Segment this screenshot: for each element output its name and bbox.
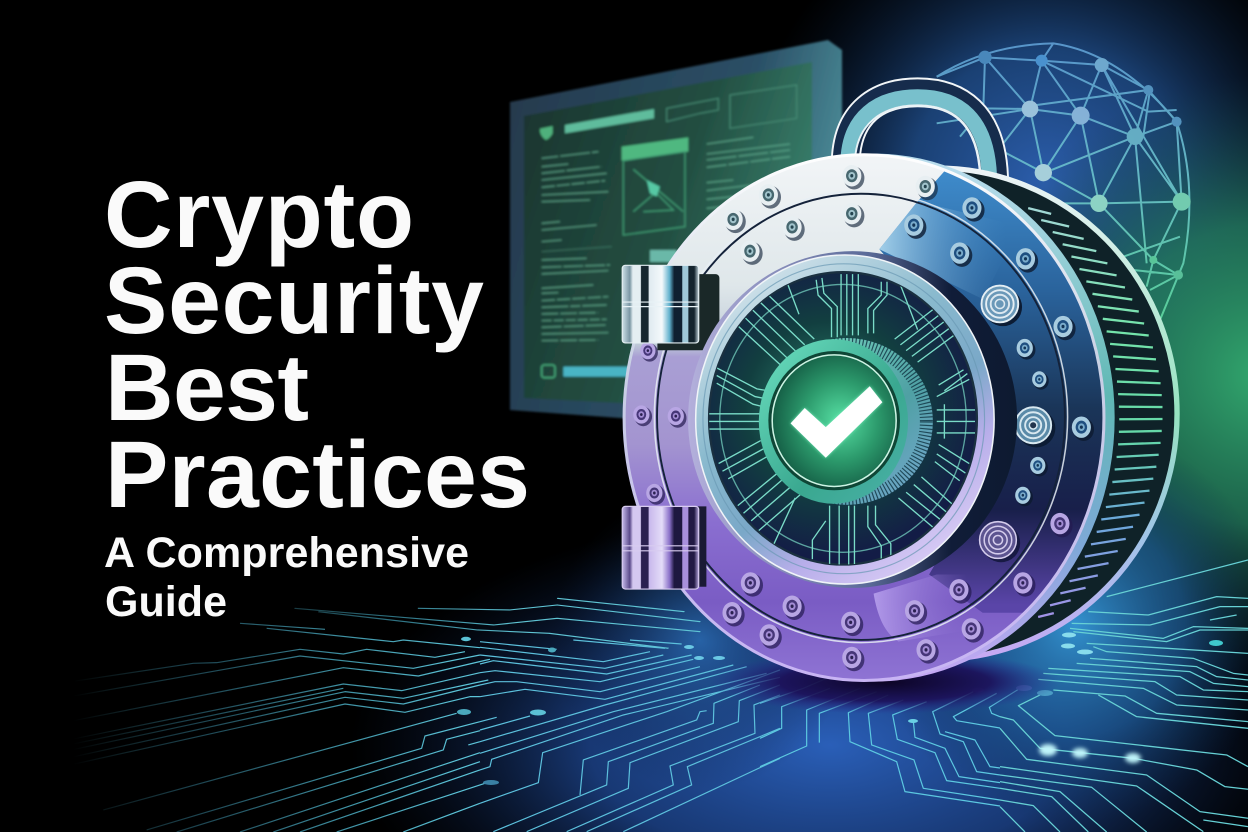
ring groove: [654, 191, 1068, 643]
vault padlock: [622, 92, 1177, 682]
circuit traces: centre left fan: [480, 640, 780, 832]
subtitle: [104, 529, 469, 626]
window glass with circuit: [709, 272, 977, 565]
title: Crypto: [104, 162, 414, 268]
combination dial: [759, 338, 933, 505]
rivets: [633, 165, 1094, 671]
back body with slats: [633, 154, 1177, 682]
hinges: [622, 265, 719, 589]
shadow under lock: [710, 650, 1060, 714]
title: Best: [105, 335, 309, 441]
front ring: [623, 150, 1113, 682]
circuit traces: upper left: [294, 598, 700, 648]
subtitle: Guide: [105, 578, 227, 626]
window ring: [696, 255, 994, 584]
check mark: [791, 386, 882, 458]
title: Security: [104, 248, 484, 354]
monitor frame: [510, 40, 842, 434]
circuit node dots: [457, 632, 1223, 785]
circuit traces: right fan: [1000, 560, 1248, 832]
title: [104, 162, 530, 528]
circuit traces: left fan: [60, 623, 490, 832]
title: Practices: [105, 422, 530, 528]
background monitor: [510, 40, 842, 434]
spiral bolts: [980, 286, 1055, 562]
monitor screen: [524, 62, 812, 413]
screen content: [540, 85, 797, 378]
shackle: [846, 92, 994, 184]
circuit traces: centre right fan: [760, 678, 1020, 806]
wireframe globe: [937, 43, 1191, 320]
subtitle: A Comprehensive: [104, 529, 469, 577]
window ledge: [688, 251, 1017, 588]
